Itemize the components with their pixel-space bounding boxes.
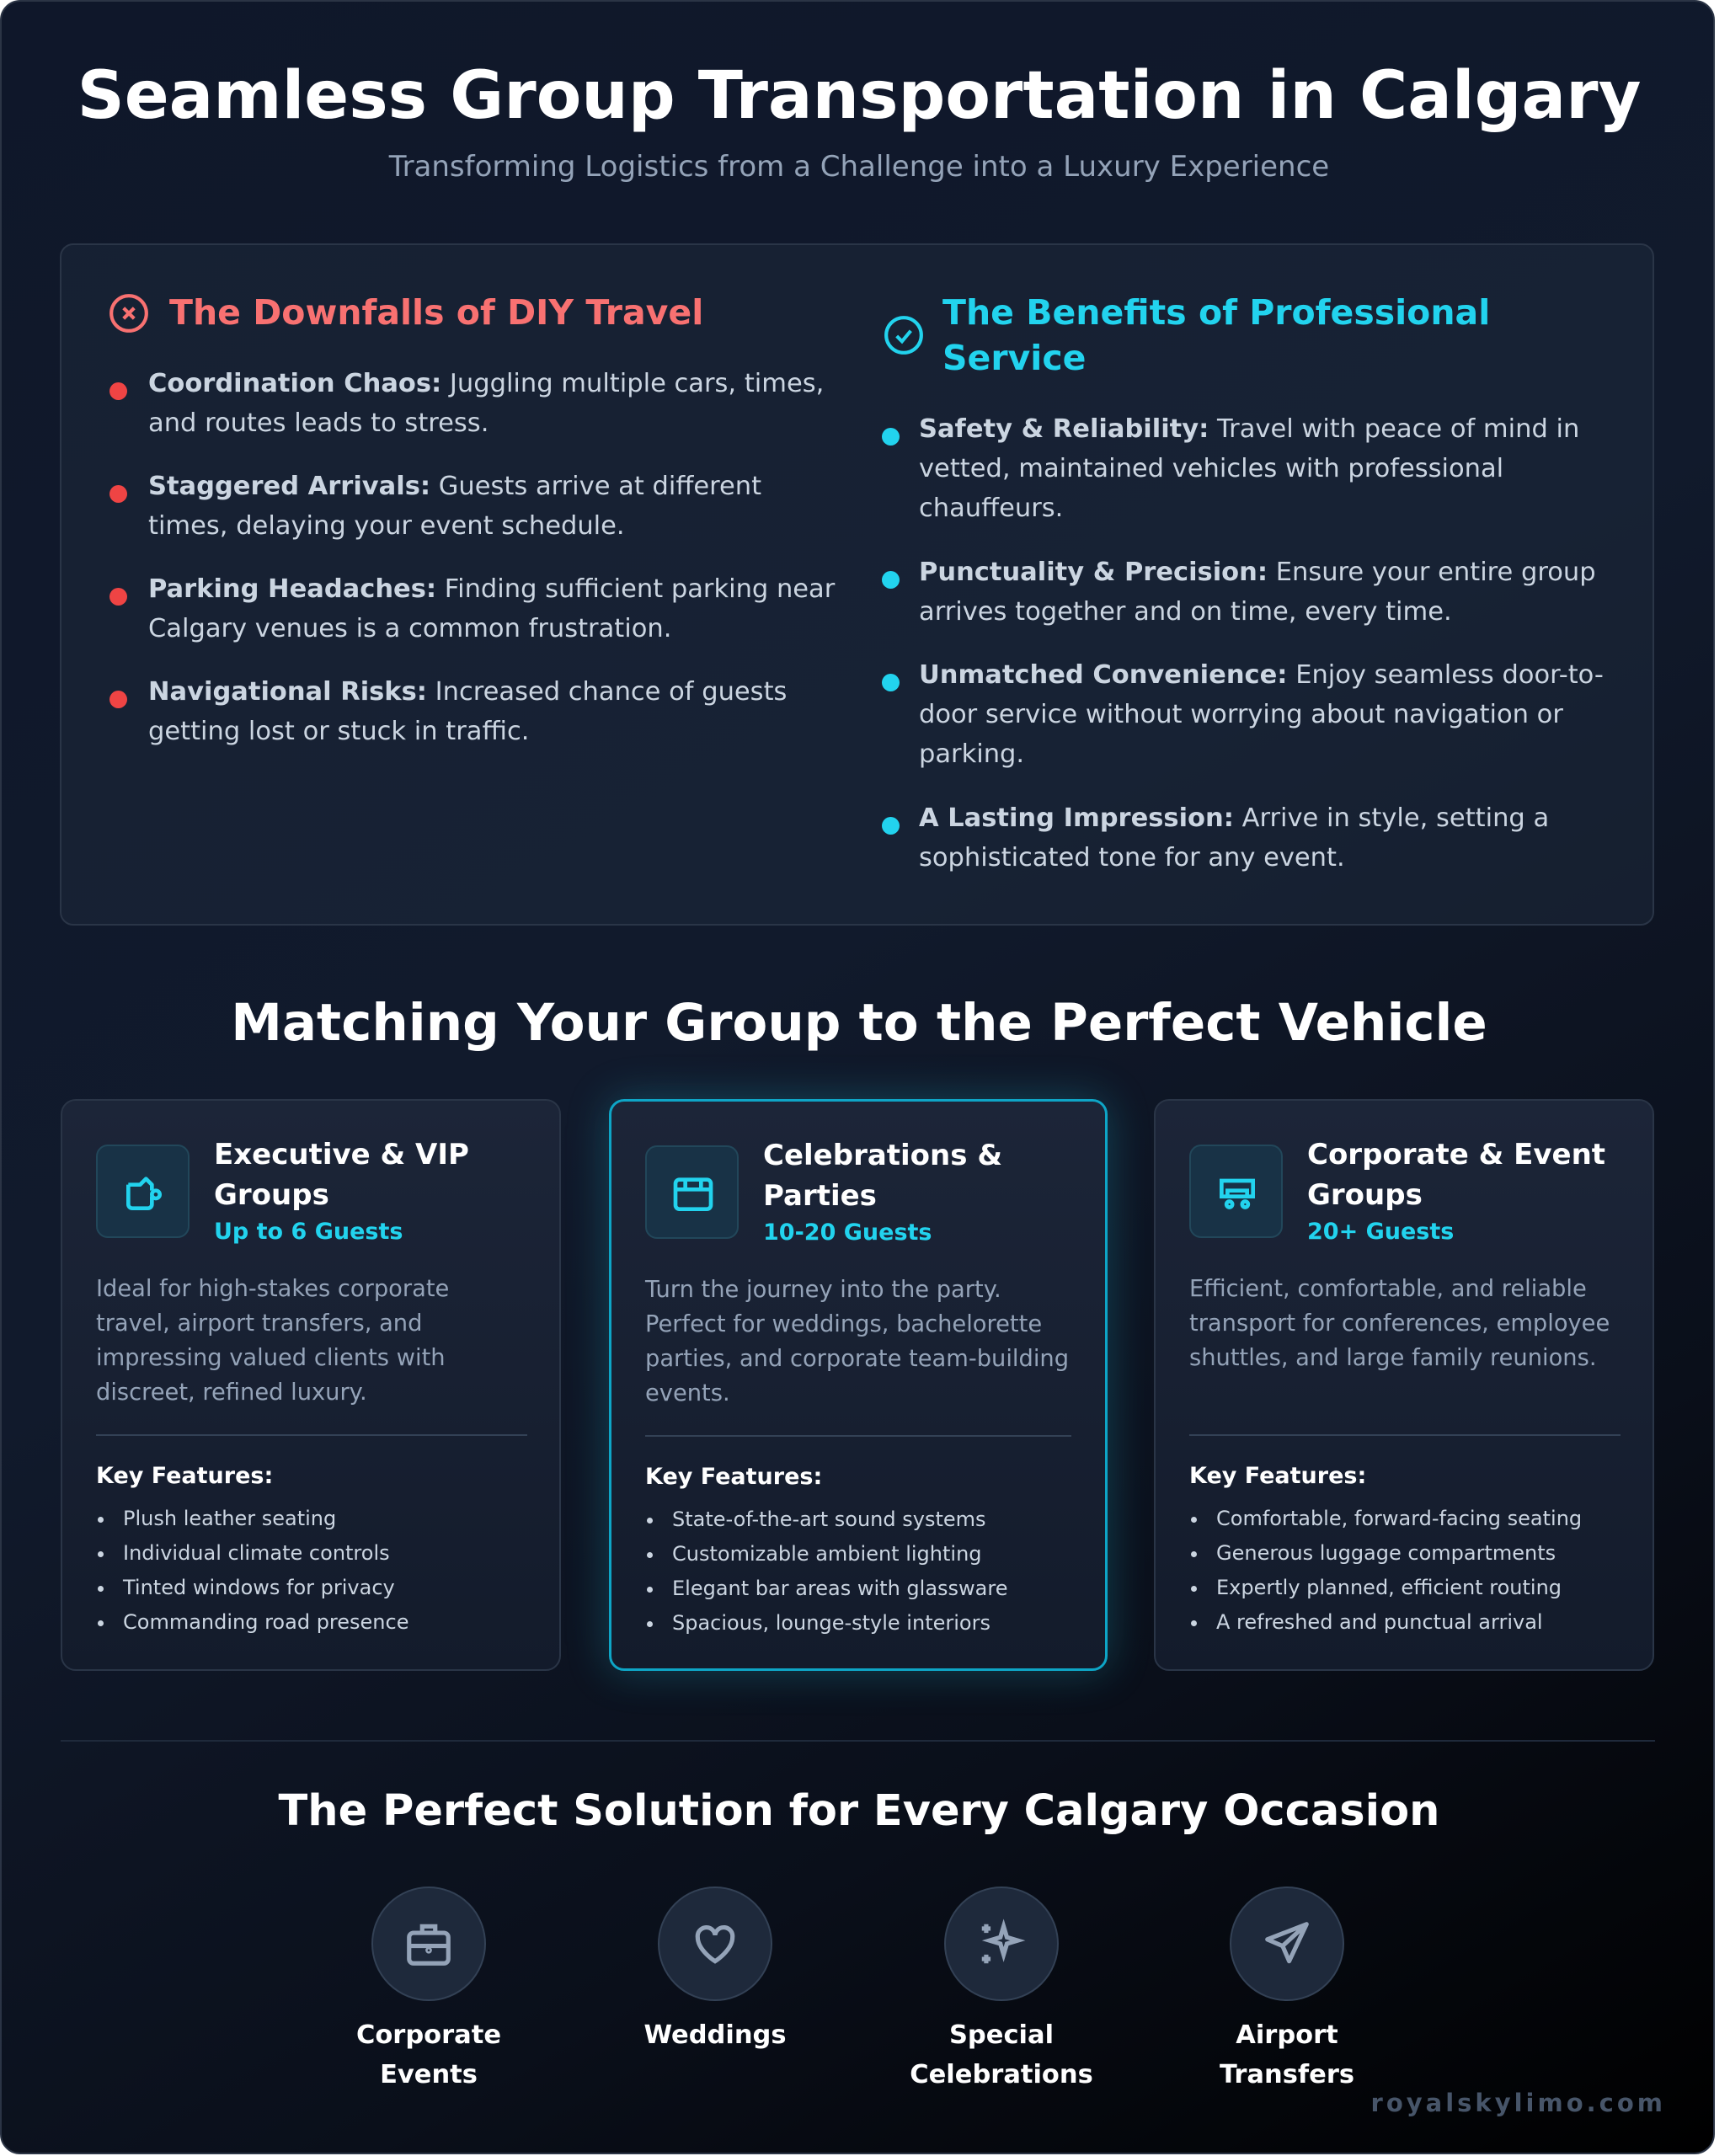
card: corporate: Groups [1307, 1178, 1423, 1212]
list: benefits: A Lasting Impression: Arrive in style, setting a sophisticated tone for any event. [919, 803, 1549, 873]
card: corporate: Generous luggage compartments [1216, 1541, 1556, 1565]
card: executive: Plush leather seating [123, 1507, 336, 1530]
card: executive [61, 1099, 561, 1671]
occasion: airport transfers: Transfers [1220, 2060, 1354, 2089]
icon: check circle [884, 316, 923, 355]
icon: x circle [109, 294, 148, 333]
list: downfalls: Parking Headaches: Finding sufficient parking near Calgary venues is a common frustration. [148, 574, 835, 643]
occasion: airport transfers: Airport [1236, 2020, 1338, 2050]
occasion: corporate events: Events [380, 2060, 478, 2089]
card: executive: Key Features: [96, 1463, 273, 1489]
card: corporate: Key Features: [1189, 1463, 1366, 1489]
title: Seamless Group Transportation in Calgary [77, 58, 1641, 134]
card: celebrations: Parties [763, 1179, 877, 1213]
card: corporate: A refreshed and punctual arrival [1216, 1610, 1543, 1634]
occasion: special celebrations [910, 1886, 1093, 2089]
occasion: airport transfers [1220, 1886, 1354, 2089]
section heading: occasions: The Perfect Solution for Every Calgary Occasion [278, 1786, 1440, 1836]
list: benefits: Unmatched Convenience: Enjoy seamless door-to-door service without worrying about navigation or parking. [919, 660, 1604, 769]
card: celebrations: Key Features: [645, 1464, 822, 1490]
card: executive: Groups [214, 1178, 329, 1212]
subtitle: Transforming Logistics from a Challenge into a Luxury Experience [389, 150, 1329, 184]
card: executive: Individual climate controls [123, 1541, 390, 1565]
card: executive: Ideal for high-stakes corporate travel, airport transfers, and impressing valued clients with discreet, refined luxury. [96, 1276, 449, 1406]
list: downfalls: Staggered Arrivals: Guests arrive at different times, delaying your event schedule. [148, 472, 761, 541]
card: corporate: Expertly planned, efficient routing [1216, 1576, 1562, 1599]
list: downfalls: Coordination Chaos: Juggling multiple cars, times, and routes leads to stress. [148, 369, 824, 438]
card: celebrations: 10-20 Guests [763, 1219, 932, 1246]
icon: bus [1189, 1145, 1283, 1238]
icon: executive [96, 1145, 190, 1238]
card: celebrations: Turn the journey into the party. Perfect for weddings, bachelorette parties, and corporate team-building events. [645, 1277, 1069, 1406]
list: benefits: Safety & Reliability: Travel with peace of mind in vetted, maintained vehicles with professional chauffeurs. [919, 414, 1579, 523]
card: celebrations: Customizable ambient lighting [672, 1542, 982, 1566]
card: executive: Commanding road presence [123, 1610, 408, 1634]
card: corporate [1154, 1099, 1654, 1671]
list: benefits: Punctuality & Precision: Ensure your entire group arrives together and on time, every time. [919, 558, 1596, 627]
panel: comparison [60, 243, 1654, 926]
card: executive: Up to 6 Guests [214, 1219, 403, 1245]
card: celebrations: Celebrations & [763, 1139, 1002, 1172]
card: celebrations: Spacious, lounge-style interiors [672, 1611, 990, 1635]
section heading: vehicles: Matching Your Group to the Perfect Vehicle [231, 993, 1487, 1053]
card: celebrations: Elegant bar areas with glassware [672, 1577, 1007, 1600]
occasion: weddings: Weddings [643, 2020, 787, 2050]
card: corporate: Comfortable, forward-facing seating [1216, 1507, 1582, 1530]
card: celebrations [609, 1099, 1108, 1671]
card: corporate: 20+ Guests [1307, 1219, 1454, 1245]
card: corporate: Corporate & Event [1307, 1138, 1605, 1171]
list: downfalls: Navigational Risks: Increased chance of guests getting lost or stuck in traffic. [148, 677, 787, 746]
icon: celebrations [645, 1145, 739, 1239]
watermark: royalskylimo.com [1371, 2089, 1666, 2117]
heading: benefits: The Benefits of Professional Service [942, 292, 1490, 378]
occasion: corporate events: Corporate [356, 2020, 501, 2050]
occasion: corporate events [356, 1886, 501, 2089]
card: corporate: Efficient, comfortable, and reliable transport for conferences, employee shuttles, and large family reunions. [1189, 1276, 1610, 1371]
list: downfalls [109, 369, 836, 746]
card: executive: Tinted windows for privacy [123, 1576, 395, 1599]
list: benefits [882, 414, 1604, 873]
occasion: weddings [643, 1886, 787, 2050]
card: executive: Executive & VIP [214, 1138, 469, 1171]
occasion: special celebrations: Celebrations [910, 2060, 1093, 2089]
heading: downfalls: The Downfalls of DIY Travel [169, 292, 703, 333]
occasion: special celebrations: Special [949, 2020, 1054, 2050]
card: celebrations: State-of-the-art sound systems [672, 1508, 986, 1531]
